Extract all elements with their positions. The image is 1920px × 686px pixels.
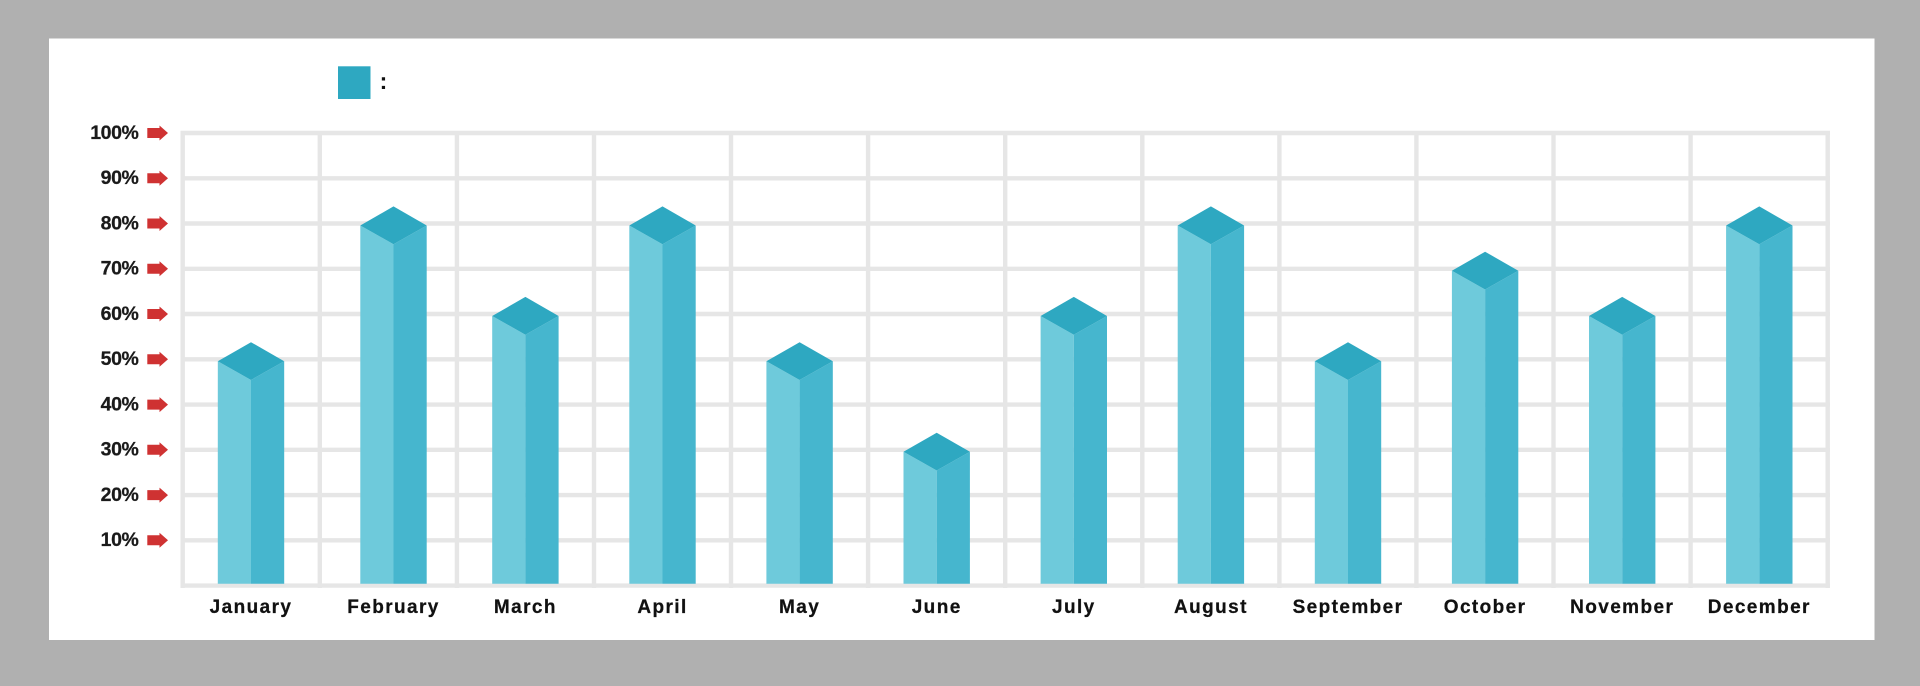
y-axis labels: 40% — [101, 394, 139, 416]
bar: March 60% — [492, 297, 559, 584]
x-axis month labels: March — [494, 597, 557, 618]
bar: July 60% — [1041, 297, 1107, 584]
bar: November 60% — [1589, 297, 1655, 584]
legend — [338, 66, 387, 99]
x-axis month labels: September — [1293, 597, 1403, 618]
red arrows — [147, 126, 168, 548]
legend: : — [380, 68, 387, 94]
x-axis month labels: July — [1052, 597, 1096, 618]
x-axis month labels: February — [347, 597, 440, 618]
y-axis labels: 60% — [101, 303, 139, 325]
y-axis labels: 90% — [101, 167, 139, 189]
y-axis labels — [90, 122, 139, 551]
y-axis labels: 100% — [90, 122, 139, 144]
bar: June 30% — [904, 433, 970, 584]
x-axis month labels: May — [779, 597, 820, 618]
bar: September 50% — [1315, 342, 1381, 584]
chart grid — [180, 131, 1830, 588]
x-axis month labels: December — [1708, 597, 1811, 618]
x-axis month labels: August — [1174, 597, 1248, 618]
x-axis month labels: October — [1444, 597, 1526, 618]
y-axis labels: 80% — [101, 212, 139, 234]
x-axis month labels — [210, 597, 1811, 618]
bar: January 50% — [218, 342, 284, 584]
x-axis month labels: June — [912, 597, 962, 618]
y-axis labels: 20% — [101, 484, 139, 506]
bar: August 80% — [1178, 206, 1244, 584]
x-axis month labels: January — [210, 597, 292, 618]
bar: April 80% — [629, 206, 696, 584]
bar: May 50% — [766, 342, 833, 584]
y-axis labels: 70% — [101, 258, 139, 280]
bar: February 80% — [360, 206, 427, 584]
y-axis labels: 30% — [101, 439, 139, 461]
y-axis labels: 10% — [101, 529, 139, 551]
bar: December 80% — [1726, 206, 1792, 584]
bar: October 70% — [1452, 252, 1518, 584]
y-axis labels: 50% — [101, 348, 139, 370]
x-axis month labels: April — [637, 597, 688, 618]
x-axis month labels: November — [1570, 597, 1674, 618]
